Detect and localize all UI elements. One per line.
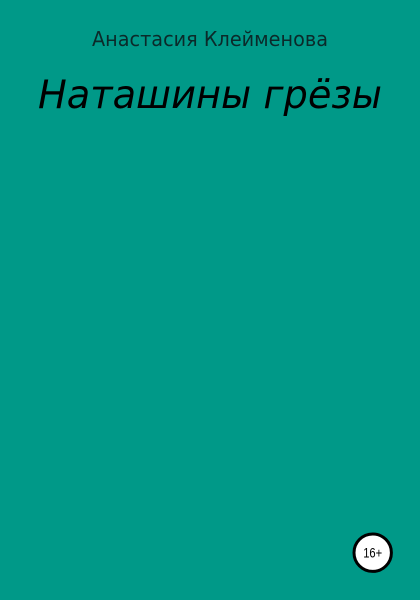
age rating badge [354,534,391,571]
author name: Анастасия Клейменова [92,27,328,51]
age rating badge: 16+ [363,546,382,560]
title: Наташины грёзы [38,73,382,118]
